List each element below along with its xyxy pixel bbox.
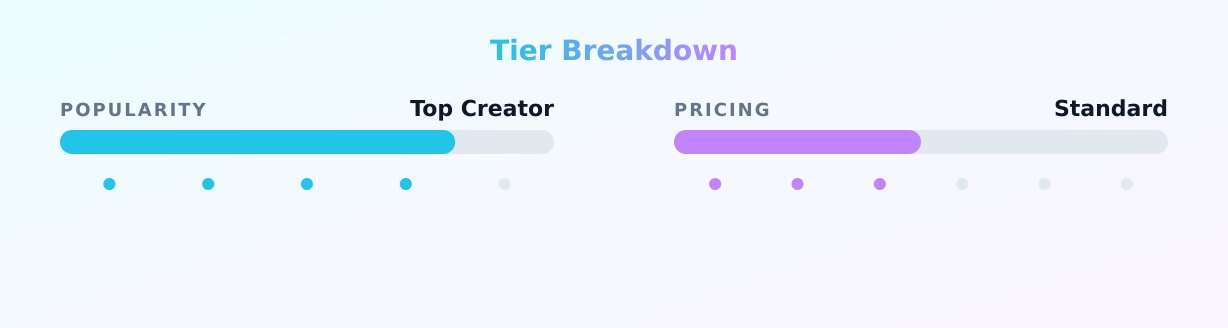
- pricing progress bar: [674, 130, 1168, 154]
- popularity label: POPULARITY: [60, 100, 208, 121]
- popularity value: Top Creator: [410, 97, 554, 122]
- pricing value: Standard: [1054, 97, 1168, 122]
- title: Tier Breakdown: [490, 34, 738, 67]
- pricing dots: [709, 178, 1133, 190]
- panel: popularity: [60, 97, 554, 190]
- panel: pricing: [674, 97, 1168, 190]
- popularity progress bar: [60, 130, 554, 154]
- pricing label: PRICING: [674, 100, 772, 121]
- popularity dots: [103, 178, 511, 190]
